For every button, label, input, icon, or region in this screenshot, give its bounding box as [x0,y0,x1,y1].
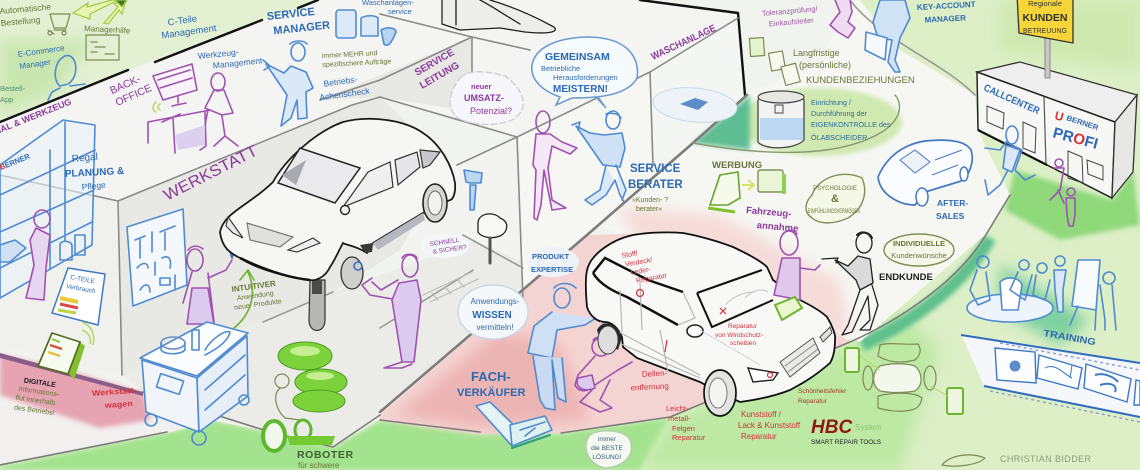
text: alloy rim repair [666,404,706,442]
text: workshop wagon: wagen [103,399,133,410]
car: lifted car [220,119,455,289]
panel: sales floor [457,247,632,468]
text: key account manager: MANAGER [924,13,966,25]
text: cosmetic repair: Reparatur [798,398,828,405]
icon: hand wash basin [478,214,507,263]
text: tool management [197,44,263,72]
text: robot: für schwere [298,461,340,470]
icon: c-parts inventory card: C-TEILE [70,274,96,285]
icon: smartphones and car diagram [845,344,963,414]
text: automatic ordering: Bestellung [0,15,41,28]
text: shelf planning: Regal [71,152,98,165]
callout: sales potential: Potenzial? [470,106,512,116]
callout: master challenges together: Betriebliche [541,64,580,73]
figure: e-commerce manager [48,56,85,100]
text: robot [297,449,354,470]
text: advertising: WERBUNG [712,160,762,171]
text: back-office: OFFICE [114,82,154,109]
callout: fast and safe: SCHNELL [429,237,460,248]
text: digital information: Informations- [18,386,60,399]
text: tool management: Management [212,55,263,70]
text: dent removal: entfernung [630,382,669,393]
callout: convey application knowledge [458,285,528,339]
text: operations check: Betriebs- [323,74,358,89]
panel: repair labels [621,246,963,446]
text: shelf planning [65,152,125,192]
text: berner profi logo [1051,108,1100,153]
text: hbc logo: System [855,423,882,432]
text: windscreen repair: scheiben [730,340,756,347]
icon: regional customer care sign: KUNDEN [1023,12,1067,24]
icon: tyre-carrying robot [263,342,347,451]
text: intuitive use: neuer Produkte [234,298,282,312]
figure: walking person purple [830,0,855,38]
text: vehicle reception: annahme [756,220,799,235]
text: service management heading: SERVICE [413,47,457,79]
text: callcenter: CALLCENTER [982,83,1042,117]
text: alloy rim repair: metall- [668,414,691,423]
text: after-sales: AFTER- [937,198,968,208]
icon: shelf unit [0,120,95,298]
building body [977,62,1137,198]
icon: intuitive arrows [234,270,254,328]
figure: mechanic at wheel [354,254,421,368]
text: alloy rim repair: Reparatur [672,433,706,442]
text: operations check: Achenscheck [319,85,371,102]
callout: product expertise: PRODUKT [532,252,570,261]
walls [0,0,902,375]
figure: two small customers [1050,159,1075,226]
icon: c-parts inventory card: Verbrauch [66,283,96,295]
callout: psychology and empathy: EINFÜHLUNGSVERMÖGEN [808,208,860,215]
text: car wash heading: WASCHANLAGE [650,23,718,63]
icon: regional customer care sign [1017,0,1073,78]
figure: mechanic on wagon [183,246,235,324]
text: end customer: ENDKUNDE [879,272,933,283]
callout: individual customer wishes: INDIVIDUELLE [893,239,945,248]
text: service manager: MANAGER [273,19,331,37]
text: operations check [317,72,371,102]
signature: artist: CHRISTIAN BIDDER [1000,454,1092,464]
icon: car wash floor [652,84,738,126]
text: hbc logo: HBC [811,417,852,438]
text: cosmetic repair [798,388,847,405]
text: intuitive use [231,278,282,312]
text: maintenance service: service [388,7,412,16]
callout: master challenges together [532,37,637,108]
callout: master challenges together: MEISTERN! [553,84,608,95]
text: service management heading [413,47,462,92]
text: windscreen repair [715,323,763,347]
icon: red damage marks [636,290,772,378]
text: alloy rim repair: Leicht- [666,404,689,413]
text: automatic ordering [0,2,53,28]
figure: specialist salesperson [528,284,596,410]
text: cosmetic repair: Schönheitsfehler [798,388,847,395]
text: tolerance: Einkaufsleiter [768,15,815,28]
text: plastic and paint repair [738,410,801,441]
panel: long term customer area [749,0,977,221]
text: fabric and leather repair: Reparatur [636,272,668,285]
icon: workshop trolley [140,322,249,445]
icon: tool case [476,402,552,448]
text: fabric and leather repair [621,246,668,287]
figure: warehouse worker [26,210,50,300]
text: c-parts management [159,11,218,42]
text: oil separator inspection: Einrichtung / [811,98,851,107]
icon: service lift post [309,280,325,330]
text: c-parts management: C-Teile [167,14,198,29]
text: oil separator inspection: EIGENKONTROLLE des [811,120,891,129]
figure: reception employee [774,230,820,300]
icon: advertising board [708,172,754,212]
text: manager helper: Managerhilfe [84,24,131,35]
callout: psychology and empathy [806,174,865,223]
icon: car behind partition [442,0,555,33]
callout: sales potential [450,72,523,124]
text: specialist sales: VERKÄUFER [457,386,526,399]
callout: psychology and empathy: PSYCHOLOGIE [813,186,857,192]
icon: screen advert [758,170,786,194]
text: service manager: SERVICE [266,6,315,23]
text: intuitive use: INTUITIVER [231,279,277,294]
text: c-parts management: Management [161,23,218,42]
text: fabric and leather repair: Verdeck/ [625,257,653,268]
text: werkstatt heading: WERKSTATT [161,143,261,205]
icon: training film strip [961,335,1140,422]
callout: psychology and empathy: & [831,193,839,205]
callout: fast and safe: & SICHER? [432,244,468,256]
text: key account manager [917,0,977,25]
text: service management heading: LEITUNG [418,60,462,92]
text: back-office [108,70,154,109]
text: customer advisor: berater« [636,206,662,213]
text: long term customer relations: Langfristige [793,48,840,58]
icon: regional customer care sign: BETREUUNG [1023,28,1067,35]
text: maintenance service [362,0,414,16]
callout: product expertise: EXPERTISE [531,265,573,274]
icon: green tablet on bonnet [775,297,802,320]
text: specialist sales [457,369,526,399]
icon: c-parts inventory card [52,268,105,325]
text: windscreen repair: von Windschutz- [715,332,763,339]
text: more requests: immer MEHR und [322,50,378,60]
text: shelf planning: PLANUNG & [65,166,125,180]
text: training: TRAINING [1042,328,1097,348]
text: after-sales: SALES [936,211,965,221]
figure: service advisor in blue [572,111,626,205]
text: digital information: DIGITALE [23,378,57,389]
text: dent removal: Dellen- [642,369,668,379]
callout: individual customer wishes: Kundenwünsche [891,251,947,260]
text: windscreen repair: Reparatur [728,323,758,330]
text: tolerance [761,4,820,29]
callout: always the best solution: LÖSUNG! [592,453,622,461]
text: digital information: flut innerhalb [15,395,56,407]
text: hbc logo: SMART REPAIR TOOLS [811,439,882,446]
icon: service icons [336,10,396,45]
text: plastic and paint repair: Lack & Kunststoff [738,421,801,430]
text: long term customer relations: KUNDENBEZIEHUNGEN [806,75,915,86]
text: hbc logo [811,417,882,446]
text: customer advisor [632,197,668,213]
callout: product expertise [527,247,579,277]
icon: box and shelf items [0,235,85,262]
figure: colleague in purple [533,111,577,220]
text: fabric and leather repair: Stoff/ [621,250,638,260]
text: service advisor: SERVICE [630,163,681,175]
text: plastic and paint repair: Reparatur [741,432,777,441]
panel: back office [0,5,331,153]
icon: shopping cart [48,14,70,35]
figure: kneeling repair technician [575,337,632,412]
callout: master challenges together: Herausforderungen [553,73,618,82]
icon: oil separator tank [758,91,804,148]
text: fabric and leather repair: Leder- [630,266,652,277]
text: workshop wagon [92,386,137,410]
callout: master challenges together: GEMEINSAM [545,51,610,63]
text: after-sales [936,198,968,221]
text: key account manager: KEY-ACCOUNT [917,0,976,12]
text: e-commerce manager: E-Commerce [17,43,66,59]
text: intuitive use: Anwendung [237,290,274,302]
text: long term customer relations: (persönliche) [799,60,851,70]
callout: individual customer wishes [884,234,954,266]
panel: training [961,256,1140,422]
text: more requests [322,49,391,69]
text: digital information: des Betriebs! [14,404,55,417]
signature: artist [942,454,1092,466]
text: tool management: Werkzeug- [197,47,239,61]
callout: convey application knowledge: WISSEN [472,310,512,321]
text: shelf planning: Pflege [81,179,106,192]
text: order app: Bestell- [0,84,26,93]
text: oil separator inspection [811,98,891,142]
icon: digital tablet [38,322,94,380]
panel: service leitung [317,0,738,220]
callout: sales potential: neuer [471,82,492,91]
text: service advisor: BERATER [628,179,683,191]
text: dent removal [630,369,669,393]
icon: document stack [749,38,800,85]
text: berner profi logo: BERNER [1065,113,1100,132]
icon: management board [86,35,119,60]
text: long term customer relations [793,48,915,86]
icon: desk with computer and worker [148,64,238,153]
text: back-office: BACK- [108,73,143,97]
car: after-sales car [878,140,972,206]
text: service advisor [628,163,683,191]
panel: call center building [977,0,1137,226]
text: specialist sales: FACH- [471,369,511,384]
text: more requests: spezifischere Aufträge [322,58,391,69]
icon: training group [967,256,1116,330]
text: vehicle reception: Fahrzeug- [746,205,792,220]
text: e-commerce manager [17,43,67,71]
text: vehicle reception [744,205,800,235]
text: tolerance: Toleranzprüfung/ [761,4,819,18]
figure: key account manager [865,0,910,72]
panel: vehicle acceptance [708,160,954,335]
icon: green arrows [73,0,127,24]
callout: convey application knowledge: Anwendungs- [471,297,520,306]
icon: tool wall board [127,209,187,306]
callout: always the best solution: immer [598,436,617,443]
text: order app [0,84,26,104]
text: workshop wagon: Werkstatt- [92,386,137,398]
car: repair car [586,232,835,416]
figure: end customer [822,232,878,335]
callout: convey application knowledge: vermitteln! [477,323,513,332]
text: automatic ordering: Automatische [0,2,52,16]
text: plastic and paint repair: Kunststoff / [741,410,782,419]
figure: service manager [263,41,313,126]
text: digital information [14,377,62,417]
text: oil separator inspection: Durchführung der [811,109,868,118]
text: order app: App [0,95,13,104]
text: berner profi logo: U [1053,108,1065,124]
callout: fast and safe [421,234,469,258]
text: oil separator inspection: ÖLABSCHEIDER [811,133,867,142]
text: robot: ROBOTER [297,449,354,461]
text: customer advisor: »Kunden- ? [632,197,668,204]
callout: sales potential: UMSATZ- [464,93,504,103]
callout: always the best solution [586,431,631,468]
figure: running person [985,126,1035,195]
text: berner profi logo: PROFI [1051,124,1100,153]
icon: dispenser [464,170,482,210]
callout: always the best solution: die BESTE [591,445,624,452]
panel: workshop [92,119,507,470]
text: alloy rim repair: Felgen [672,424,695,433]
panel: top left e-commerce area [0,0,218,104]
text: service manager [266,5,331,38]
text: e-commerce manager: Manager [19,58,52,71]
panel: shelf planning [0,120,125,417]
